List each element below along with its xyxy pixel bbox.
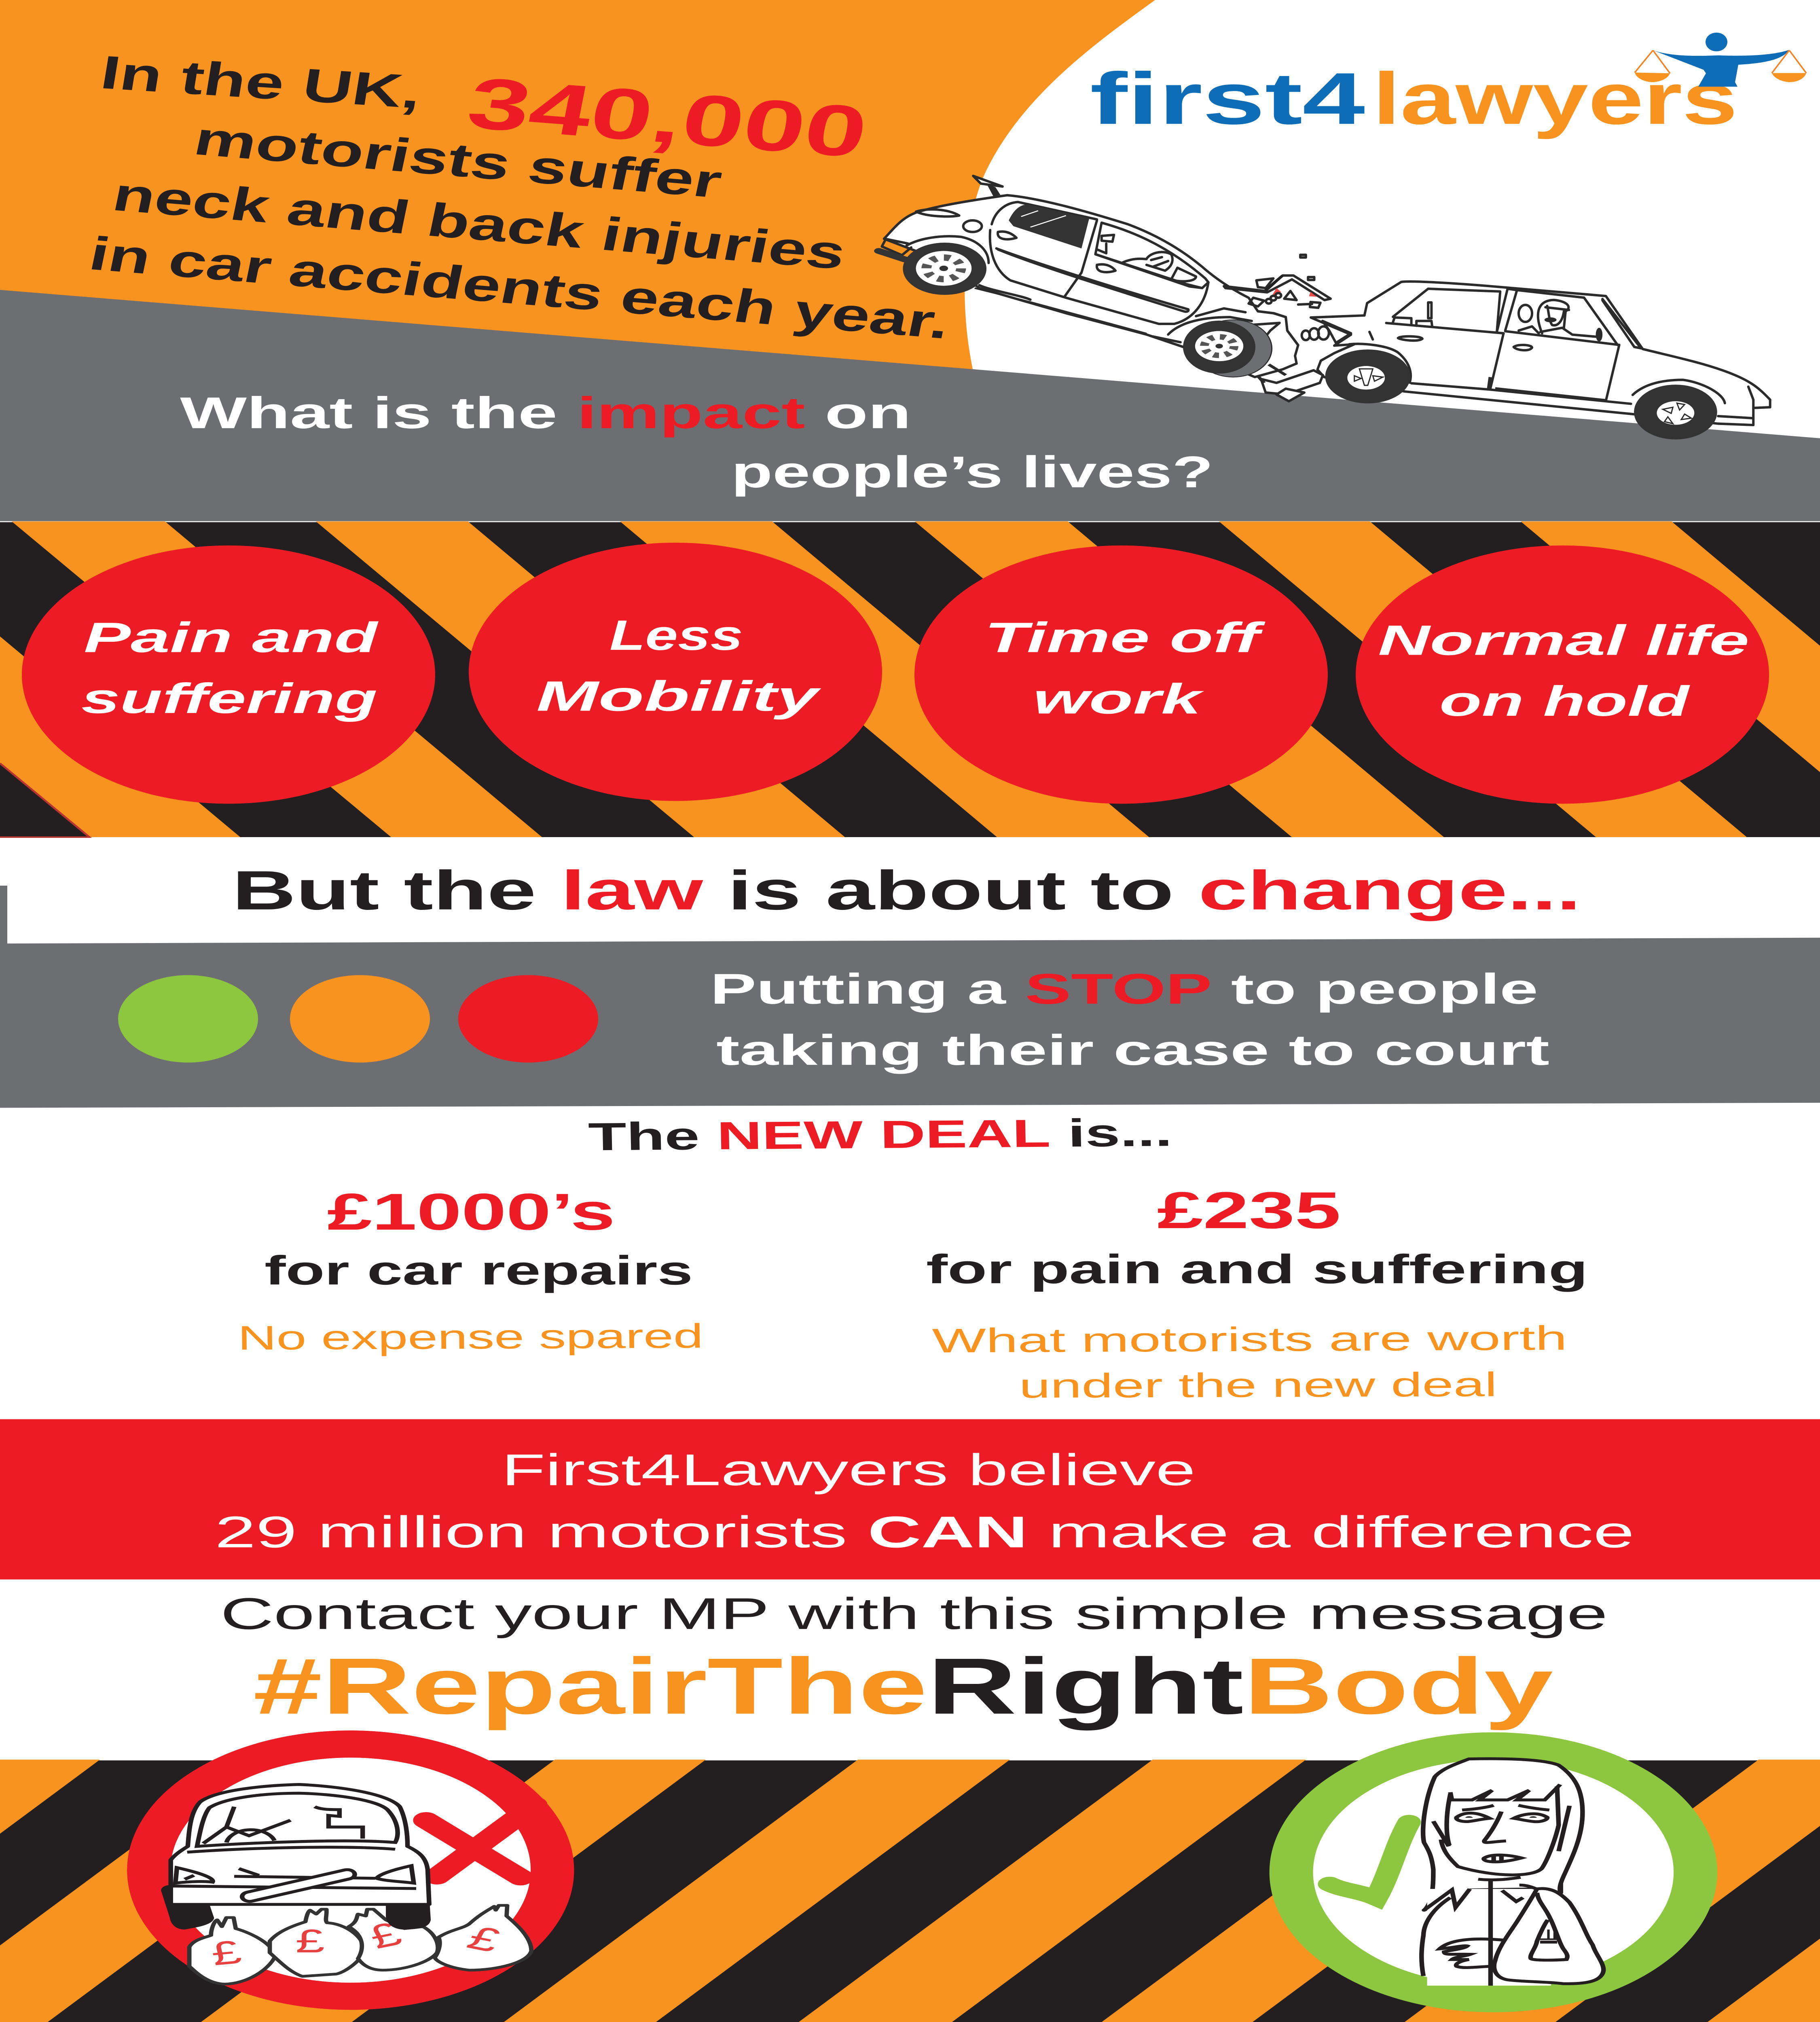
column: pain and suffering [926, 1181, 1588, 1405]
circle: time off work: work [1033, 675, 1204, 723]
first car (hatchback, tilted) [879, 176, 1331, 401]
front window and driver [1095, 223, 1208, 288]
panel: red belief banner [0, 1419, 1820, 1580]
second car (hit from behind) [1302, 281, 1770, 440]
hazard stripe background [0, 1760, 1820, 2022]
circle: less mobility: Less [609, 611, 743, 659]
circle: normal life on hold [1356, 546, 1769, 804]
orange header shape [0, 0, 1155, 404]
icon: money bags: £ [296, 1923, 325, 1959]
column: pain and suffering: £235 [1157, 1181, 1341, 1239]
headline statistic: neck and back injuries [108, 168, 850, 279]
circle: pain and suffering [22, 546, 435, 804]
front wheel [1194, 320, 1272, 377]
rear wheel [903, 243, 986, 295]
band text: taking their case to court [716, 1026, 1549, 1074]
rear bumper [879, 251, 905, 260]
traffic light dots [118, 975, 598, 1063]
question heading: What is the impact on [180, 388, 911, 438]
red ring [149, 1744, 552, 1996]
circle: time off work [914, 546, 1328, 804]
band text [710, 965, 1549, 1074]
column: car repairs: No expense spared [237, 1317, 703, 1357]
icon: damaged car [161, 1785, 429, 1929]
grey band [0, 886, 1820, 1108]
logo: first4lawyers: lawyers [1373, 58, 1737, 140]
column: car repairs: £1000’s [327, 1183, 615, 1241]
heading: the new deal: The NEW DEAL is... [588, 1110, 1172, 1159]
heading: the law is about to change: But the law is about to change... [232, 859, 1581, 921]
circle: pain and suffering: Pain and [84, 613, 379, 661]
icon: money bags: £ [461, 1919, 507, 1959]
icon: crossed-out car on money bags [149, 1744, 552, 1996]
circle: normal life on hold: Normal life [1378, 616, 1749, 664]
hashtag: #RepairTheRightBody [253, 1641, 1554, 1731]
sling [1494, 1889, 1604, 1984]
icon: money bags [189, 1906, 531, 1984]
band text: Putting a STOP to people [710, 965, 1538, 1013]
wheels [1325, 349, 1410, 404]
headline statistic: 340,000 [461, 63, 874, 173]
circle: less mobility: Mobility [536, 672, 821, 720]
grey slanted band [0, 290, 1820, 521]
hazard stripe background [0, 521, 1820, 837]
question heading [180, 388, 1213, 497]
circle: pain and suffering: suffering [81, 675, 377, 722]
question heading: people’s lives? [731, 447, 1213, 497]
circle: time off work: Time off [984, 613, 1266, 661]
panel: red belief banner: First4Lawyers believe [502, 1445, 1196, 1495]
column: pain and suffering: under the new deal [1019, 1365, 1497, 1405]
green ring [1291, 1746, 1695, 1999]
column: pain and suffering: What motorists are worth [932, 1319, 1567, 1360]
panel: traffic lights band [0, 886, 1820, 1108]
spoiler [973, 176, 1003, 186]
headline statistic: motorists suffer [190, 112, 727, 208]
icon: woman [1422, 1759, 1604, 1986]
headline statistic [85, 46, 955, 349]
icon: green tick [1329, 1822, 1409, 1898]
icon: money bags: £ [362, 1915, 408, 1956]
illustration: car crash [879, 176, 1770, 440]
logo: first4lawyers [1090, 33, 1806, 140]
icon: red cross [149, 1744, 552, 1996]
panel: red belief banner: 29 million motorists CAN make a difference [215, 1507, 1634, 1557]
headline statistic: in car accidents each year. [85, 227, 955, 349]
panel: impact on lives, hazard stripes [0, 521, 1820, 837]
headline statistic: In the UK, [97, 46, 425, 118]
column: pain and suffering: for pain and suffering [926, 1246, 1588, 1292]
rear window [1009, 205, 1089, 248]
text: contact your MP: Contact your MP with this simple message [220, 1589, 1608, 1639]
circle: normal life on hold: on hold [1439, 677, 1690, 725]
panel: bottom hazard stripes with icons [0, 1744, 1820, 2022]
circle: less mobility [469, 543, 882, 801]
logo: first4lawyers: first4 [1090, 58, 1365, 140]
column: car repairs: for car repairs [265, 1248, 693, 1293]
icon: money bags: £ [207, 1933, 245, 1972]
debris and crumpled metal [1224, 255, 1331, 401]
panel: top header [0, 0, 1820, 521]
icon: injured woman with sling and tick [1291, 1746, 1695, 1999]
column: car repairs [237, 1183, 703, 1357]
